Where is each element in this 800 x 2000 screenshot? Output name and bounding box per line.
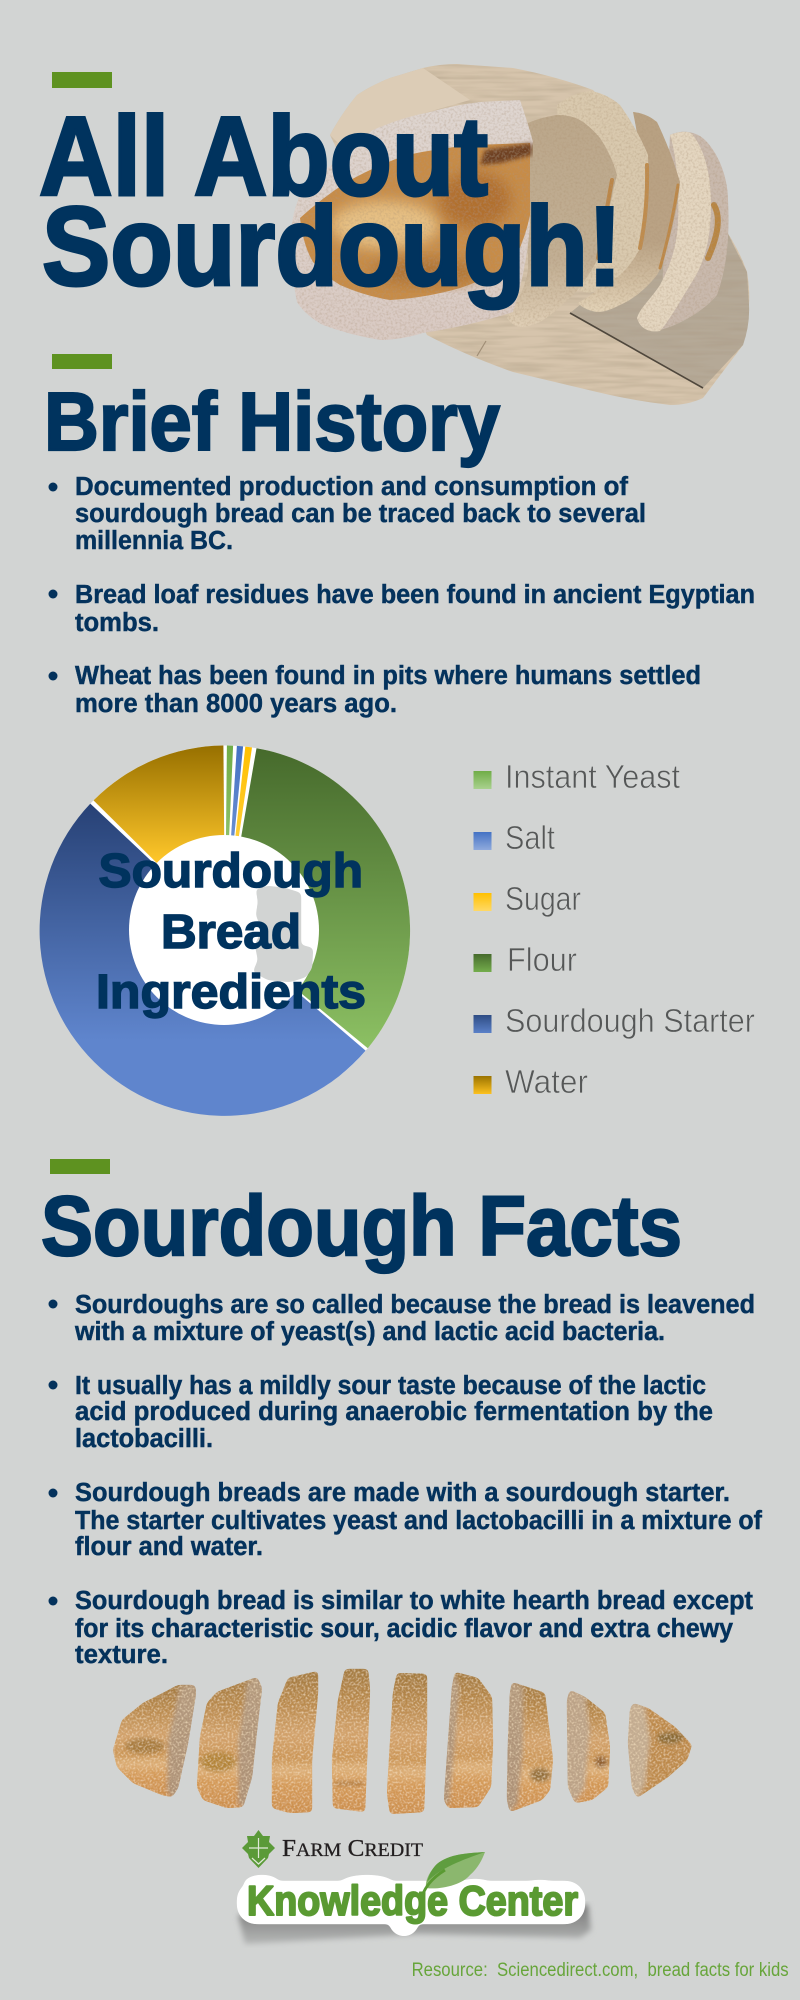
- cutting board: [330, 64, 749, 405]
- text block: sourdough facts bullets: It usually has a mildly sour taste because of the lactic: [75, 1372, 706, 1400]
- text block: sourdough facts bullets: Sourdough bread is similar to white hearth bread except: [75, 1587, 753, 1615]
- chart legend: [474, 758, 755, 1100]
- text block: sourdough facts bullets: lactobacilli.: [75, 1425, 213, 1453]
- chart legend: Salt: [505, 819, 555, 856]
- slice: water: [94, 746, 225, 930]
- icon: leaf: [420, 1852, 485, 1903]
- text block: sourdough facts bullets: Sourdough breads are made with a sourdough starter.: [75, 1479, 730, 1507]
- chart title: Sourdough: [98, 845, 363, 898]
- text block: brief history bullets: sourdough bread can be traced back to several: [75, 500, 646, 528]
- text block: sourdough facts bullets: acid produced during anaerobic fermentation by the: [75, 1398, 713, 1426]
- image: sliced baguette: [113, 1669, 692, 1814]
- title: [39, 94, 622, 309]
- chart title: Ingredients: [96, 966, 366, 1019]
- text block: brief history bullets: Wheat has been found in pits where humans settled: [75, 662, 701, 690]
- slice: salt: [225, 746, 243, 930]
- chart legend: Sourdough Starter: [505, 1002, 755, 1039]
- loaf: [291, 100, 533, 340]
- chart title: Bread: [161, 906, 301, 959]
- text block: sourdough facts bullets: Sourdoughs are so called because the bread is leavened: [75, 1291, 755, 1319]
- text block: sourdough facts bullets: texture.: [75, 1641, 168, 1669]
- chart legend: Flour: [507, 941, 577, 978]
- text block: brief history bullets: more than 8000 years ago.: [75, 690, 397, 718]
- text block: brief history bullets: millennia BC.: [75, 527, 233, 555]
- wordmark: FARM CREDIT: [282, 1836, 423, 1862]
- slice: flour: [225, 748, 410, 1048]
- chart legend: Water: [505, 1063, 588, 1100]
- text block: sourdough facts bullets: for its characteristic sour, acidic flavor and extra chewy: [75, 1615, 734, 1643]
- text block: sourdough facts bullets: The starter cultivates yeast and lactobacilli in a mixture of: [75, 1507, 762, 1535]
- chart title: [96, 845, 366, 1019]
- text block: sourdough facts bullets: [48, 1291, 762, 1669]
- title: All About: [39, 94, 488, 219]
- slice: instant yeast: [225, 746, 233, 930]
- text block: sourdough facts bullets: with a mixture of yeast(s) and lactic acid bacteria.: [74, 1318, 665, 1346]
- sticker shadow: [238, 1905, 591, 1944]
- text block: sourdough facts bullets: flour and water.: [75, 1533, 263, 1561]
- icon: Farm Credit leaf diamond: [242, 1830, 275, 1868]
- heading: Brief History: Brief History: [44, 375, 500, 468]
- bread slices: [507, 91, 729, 331]
- donut hole: [129, 835, 319, 1025]
- heading: Sourdough Facts: Sourdough Facts: [41, 1179, 682, 1273]
- title: Sourdough!: [42, 184, 622, 309]
- text block: brief history bullets: [48, 473, 755, 718]
- logo: Knowledge Center: [237, 1852, 591, 1944]
- text block: brief history bullets: tombs.: [75, 609, 159, 637]
- logo text: Knowledge Center: [247, 1877, 578, 1924]
- chart legend: Sugar: [505, 880, 581, 917]
- slice: sugar: [225, 747, 252, 930]
- green accent bar: [52, 354, 112, 369]
- green accent bar: [52, 72, 112, 88]
- image: loaf of bread on cutting board: [291, 64, 749, 405]
- sticker: [237, 1875, 585, 1936]
- donut chart: sourdough bread ingredients: [40, 746, 410, 1116]
- chart legend: Instant Yeast: [505, 758, 680, 795]
- text block: brief history bullets: Bread loaf residues have been found in ancient Egyptian: [75, 581, 755, 609]
- slice: sourdough starter: [40, 804, 366, 1116]
- logo: Farm Credit: [242, 1830, 423, 1868]
- green accent bar: [50, 1159, 110, 1174]
- text block: brief history bullets: Documented production and consumption of: [75, 473, 629, 501]
